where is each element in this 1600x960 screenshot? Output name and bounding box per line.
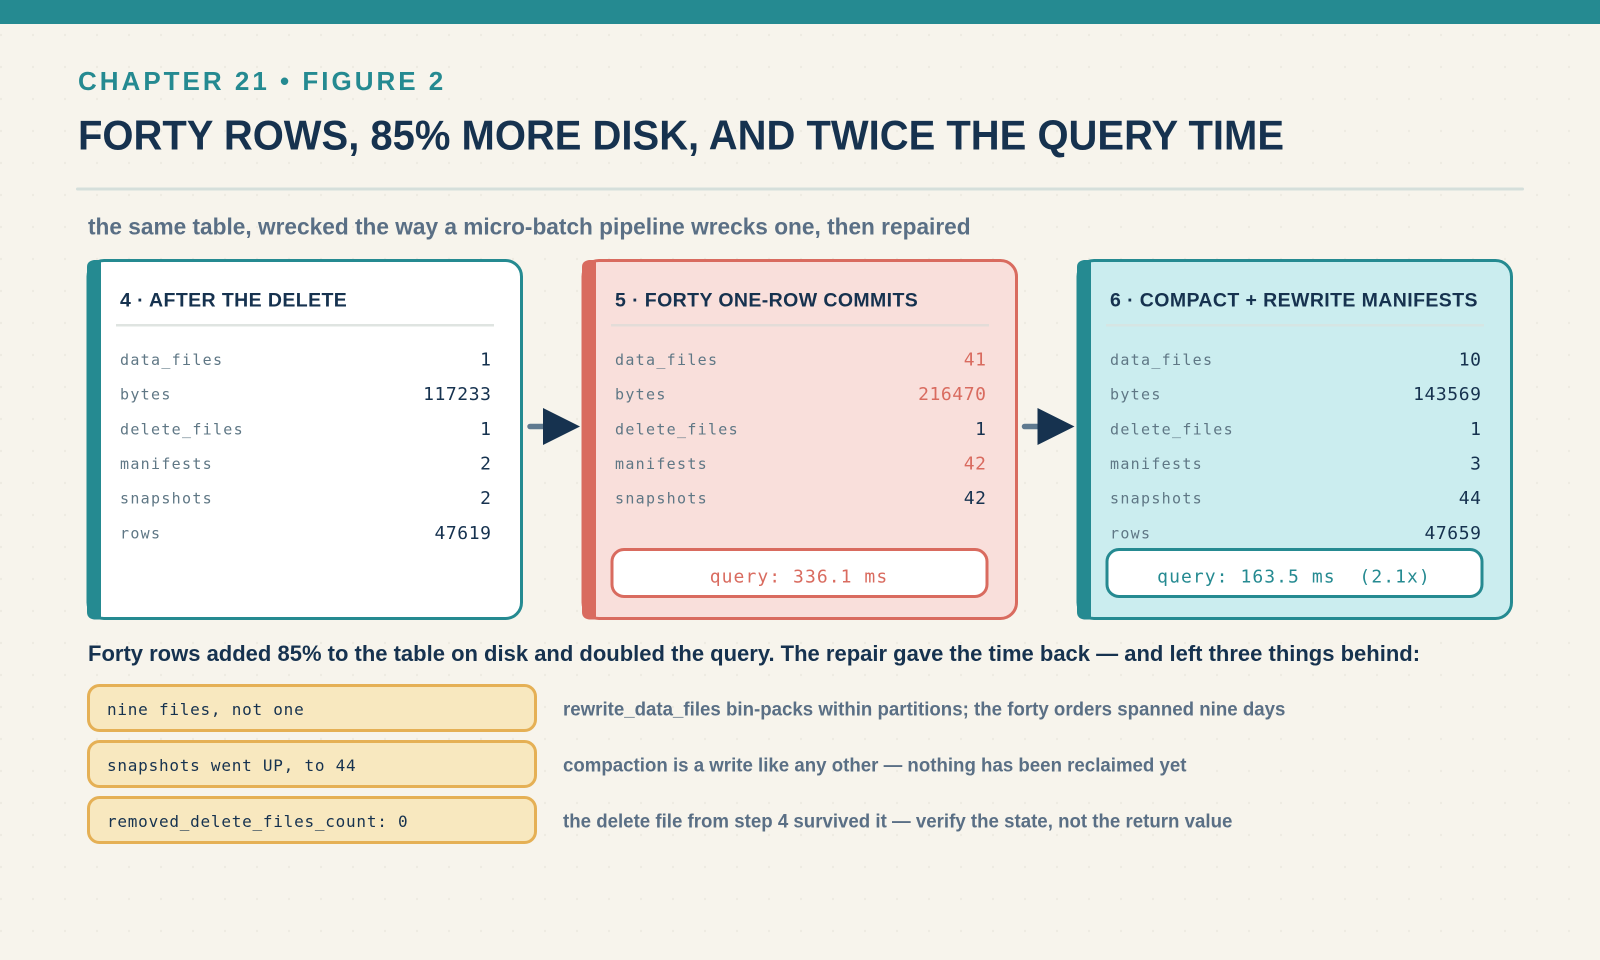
panel heading: 6 · COMPACT + REWRITE MANIFESTS — [1110, 290, 1478, 312]
query time box — [612, 550, 987, 596]
subtitle: the same table, wrecked the way a micro-batch pipeline wrecks one, then repaired — [88, 214, 971, 240]
metrics table: 3 — [1470, 454, 1482, 474]
metrics table: bytes — [615, 386, 667, 404]
takeaway 3: removed_delete_files_count: 0 — [107, 812, 408, 831]
arrow: 5 to 6 — [1024, 408, 1074, 445]
query time box: query: 336.1 ms — [710, 566, 888, 588]
eyebrow: chapter and figure: CHAPTER 21 • FIGURE 2 — [78, 66, 446, 96]
metrics table: 47619 — [434, 523, 492, 544]
metrics table: manifests — [615, 455, 708, 473]
metrics table: 42 — [964, 488, 986, 509]
query time box: query: 163.5 ms (2.1x) — [1157, 566, 1431, 588]
metrics table: 42 — [964, 454, 986, 474]
panel: 4 after the delete — [87, 260, 522, 620]
panel accent band — [87, 260, 101, 620]
takeaway 3: the delete file from step 4 survived it — verify the state, not the return value — [563, 812, 1232, 832]
metrics table: 1 — [480, 350, 492, 370]
metrics table: snapshots — [615, 490, 708, 508]
metrics table: 2 — [480, 454, 492, 474]
metrics table — [120, 350, 492, 544]
metrics table: data_files — [120, 351, 223, 369]
metrics table: 143569 — [1413, 384, 1482, 405]
metrics table — [1110, 350, 1482, 544]
title: FORTY ROWS, 85% MORE DISK, AND TWICE THE QUERY TIME — [78, 112, 1284, 158]
metrics table: bytes — [120, 386, 172, 404]
metrics table: 10 — [1459, 350, 1482, 370]
metrics table: 1 — [1470, 419, 1482, 440]
query time box — [1107, 550, 1482, 596]
metrics table: rows — [120, 524, 161, 542]
takeaway 1: rewrite_data_files bin-packs within partitions; the forty orders spanned nine days — [563, 700, 1285, 720]
takeaway 2: compaction is a write like any other — nothing has been reclaimed yet — [563, 756, 1187, 776]
takeaway 2: snapshots went UP, to 44 — [107, 756, 356, 775]
panel heading: 5 · FORTY ONE-ROW COMMITS — [615, 290, 918, 312]
metrics table: data_files — [615, 351, 718, 369]
metrics table — [615, 350, 986, 509]
top bar — [0, 0, 1600, 24]
metrics table: 117233 — [423, 384, 492, 405]
metrics table: 216470 — [918, 384, 986, 405]
metrics table: bytes — [1110, 386, 1162, 404]
metrics table: snapshots — [120, 490, 213, 508]
takeaway 2 — [88, 742, 1187, 786]
metrics table: 47659 — [1424, 523, 1482, 544]
panel accent band — [1077, 260, 1091, 620]
metrics table: data_files — [1110, 351, 1213, 369]
panel accent band — [582, 260, 596, 620]
metrics table: delete_files — [615, 420, 739, 438]
metrics table: 44 — [1459, 488, 1482, 509]
arrow: 4 to 5 — [530, 408, 580, 445]
metrics table: delete_files — [120, 420, 244, 438]
metrics table: 1 — [975, 419, 986, 440]
takeaway 3 — [88, 798, 1232, 842]
panel: 5 forty one-row commits — [582, 260, 1016, 620]
panel heading: 4 · AFTER THE DELETE — [120, 290, 347, 312]
takeaway 1: nine files, not one — [107, 700, 304, 719]
summary sentence: Forty rows added 85% to the table on disk and doubled the query. The repair gave the time back — and left three things behind: — [88, 641, 1420, 666]
metrics table: 2 — [480, 488, 492, 509]
metrics table: delete_files — [1110, 420, 1234, 438]
metrics table: 41 — [964, 350, 986, 370]
metrics table: snapshots — [1110, 490, 1203, 508]
panel: 6 compact + rewrite manifests — [1077, 260, 1512, 620]
metrics table: manifests — [1110, 455, 1203, 473]
metrics table: rows — [1110, 524, 1151, 542]
metrics table: manifests — [120, 455, 213, 473]
metrics table: 1 — [480, 419, 492, 440]
takeaway 1 — [88, 686, 1285, 730]
